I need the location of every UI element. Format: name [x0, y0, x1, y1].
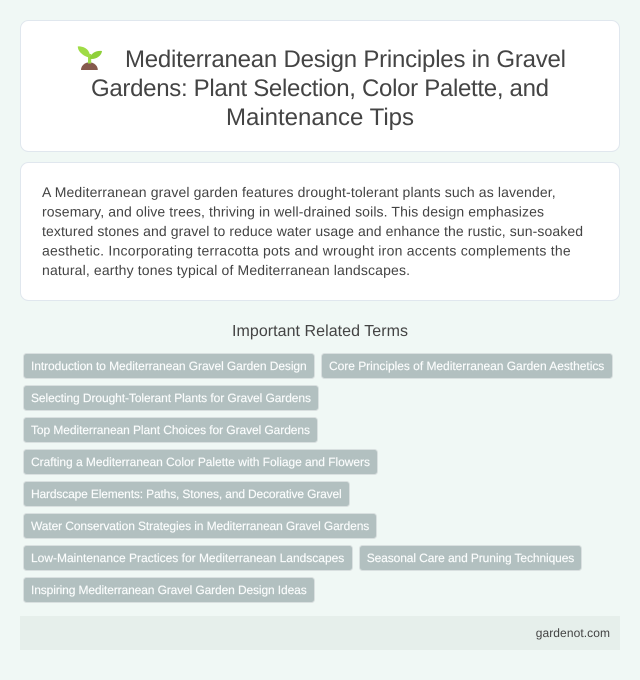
- tag: top plant choices: Top Mediterranean Plant Choices for Gravel Gardens: [31, 423, 310, 437]
- title: Mediterranean Design Principles in Gravel: [125, 46, 566, 73]
- text block: description: A Mediterranean gravel garden features drought-tolerant plants such as lavender,: [42, 184, 556, 200]
- tag: drought-tolerant plants: [24, 386, 318, 410]
- panel: description card: [20, 162, 620, 300]
- panel: related term tags: [24, 354, 612, 602]
- text block: description: aesthetic. Incorporating terracotta pots and wrought iron accents complements the: [42, 242, 571, 258]
- tag: core principles: Core Principles of Mediterranean Garden Aesthetics: [329, 359, 604, 373]
- tag: top plant choices: [24, 418, 318, 442]
- heading: related terms: Important Related Terms: [232, 323, 408, 340]
- tag: hardscape elements: Hardscape Elements: Paths, Stones, and Decorative Gravel: [31, 487, 342, 501]
- tag: introduction: Introduction to Mediterranean Gravel Garden Design: [31, 359, 307, 373]
- tag: color palette: Crafting a Mediterranean Color Palette with Foliage and Flowers: [31, 455, 370, 469]
- tag: low-maintenance practices: Low-Maintenance Practices for Mediterranean Landscapes: [31, 551, 344, 565]
- tag: core principles: [322, 354, 612, 378]
- title: Gardens: Plant Selection, Color Palette, and: [91, 75, 549, 102]
- panel: title card: [20, 20, 620, 152]
- tag: design ideas: [24, 578, 314, 602]
- title: Maintenance Tips: [226, 104, 414, 131]
- text block: description: rosemary, and olive trees, thriving in well-drained soils. This design emphasizes: [42, 204, 544, 220]
- icon: seedling: [78, 46, 102, 70]
- tag: introduction: [24, 354, 314, 378]
- tag: water conservation: [24, 514, 376, 538]
- text block: description: natural, earthy tones typical of Mediterranean landscapes.: [42, 262, 410, 278]
- footer: [20, 616, 620, 650]
- text block: description: textured stones and gravel to reduce water usage and enhance the rustic, sun-soaked: [42, 223, 583, 239]
- tag: low-maintenance practices: [24, 546, 352, 570]
- text block: description: [42, 184, 583, 278]
- tag: seasonal care: [360, 546, 582, 570]
- tag: water conservation: Water Conservation Strategies in Mediterranean Gravel Gardens: [31, 519, 369, 533]
- tag: seasonal care: Seasonal Care and Pruning Techniques: [367, 551, 574, 565]
- title: [91, 46, 566, 131]
- tag: drought-tolerant plants: Selecting Drought-Tolerant Plants for Gravel Gardens: [31, 391, 311, 405]
- tag: color palette: [24, 450, 378, 474]
- tag: design ideas: Inspiring Mediterranean Gravel Garden Design Ideas: [31, 583, 307, 597]
- footer: gardenot.com: [536, 626, 610, 640]
- tag: hardscape elements: [24, 482, 350, 506]
